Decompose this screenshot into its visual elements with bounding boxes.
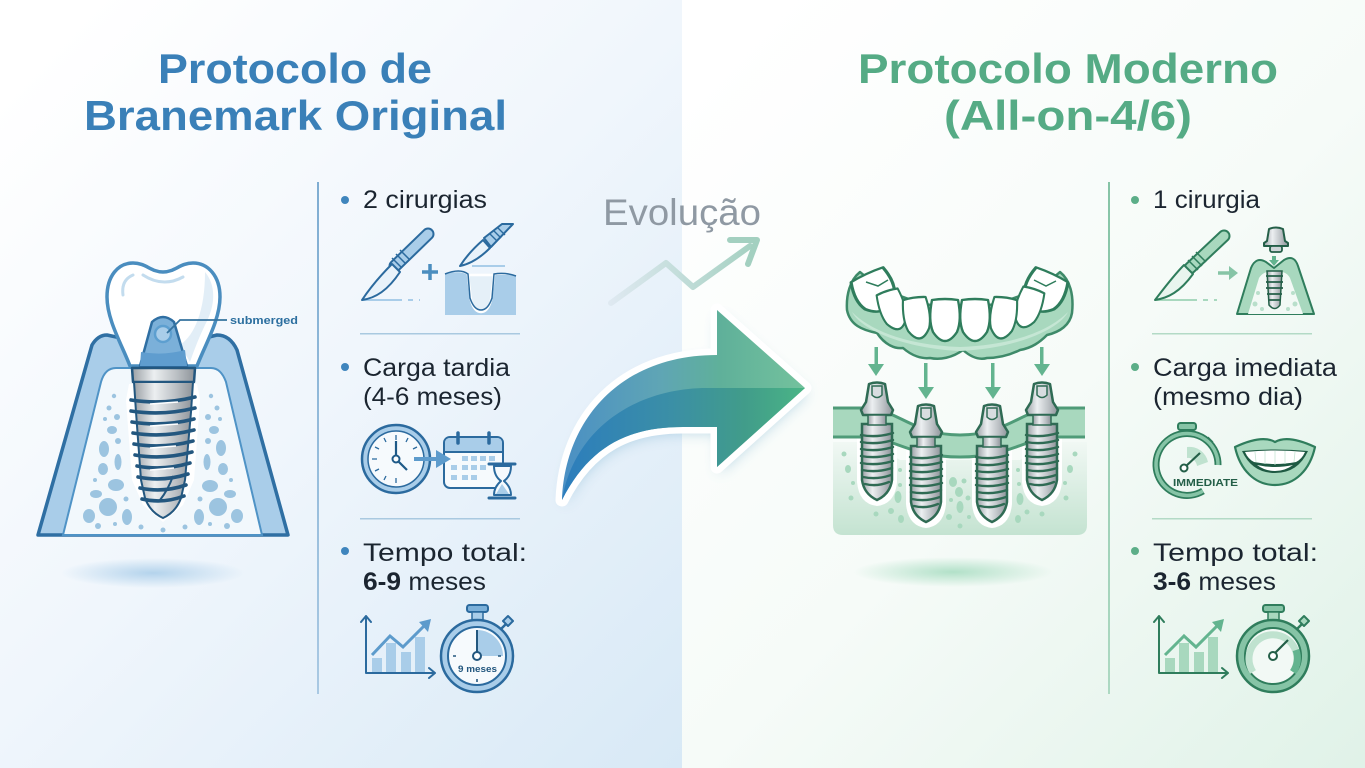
arrows: placement of the implants [868, 347, 1050, 399]
icon: clock, calendar and hourglass [362, 425, 515, 498]
right item: 1 cirurgia [1131, 186, 1314, 314]
title: Protocolo de Branemark Original: Protocolo de [158, 45, 432, 92]
right separator [1152, 333, 1312, 334]
left separator [360, 333, 520, 334]
title: Protocolo Moderno (All-on-4/6) [858, 45, 1278, 139]
title: Protocolo Moderno (All-on-4/6): (All-on-4/6) [944, 92, 1192, 139]
icon: stopwatch 9 meses [441, 605, 513, 692]
left item: 2 cirurgias: 2 cirurgias [363, 186, 487, 214]
left item: Carga tardia: (4-6 meses) [363, 383, 502, 411]
title: Protocolo Moderno (All-on-4/6): Protocolo Moderno [858, 45, 1278, 92]
icon: speedometer stopwatch [1237, 605, 1309, 692]
left item: Carga tardia: Carga tardia [363, 354, 510, 382]
icon: growth chart [361, 616, 435, 678]
icon: smile [1235, 439, 1315, 485]
left item: Tempo total: 6-9 meses [363, 568, 486, 596]
left item: 2 cirurgias [341, 186, 516, 315]
icon: stopwatch 9 meses: 9 meses [458, 664, 497, 675]
left item: Tempo total: Tempo total: [363, 539, 527, 567]
right item: Tempo total: 3-6 meses [1153, 568, 1276, 596]
right item: Carga imediata: Carga imediata [1153, 354, 1337, 382]
illustration: single tooth with submerged implant [38, 263, 298, 588]
icon: immediate stopwatch [1156, 423, 1238, 495]
right item: Carga imediata [1131, 354, 1337, 495]
label: Evolução: Evolução [603, 192, 761, 233]
right separator [1152, 518, 1312, 520]
denture arch [847, 265, 1072, 359]
illustration: single tooth with submerged implant: submerged [230, 315, 298, 327]
icon: two scalpels, plus sign and incision [362, 224, 516, 315]
right item: 1 cirurgia: 1 cirurgia [1153, 186, 1260, 214]
right item: Carga imediata: (mesmo dia) [1153, 383, 1303, 411]
background: left blue panel [0, 0, 682, 768]
arrow: main evolution arrow [562, 310, 807, 506]
title: Protocolo de Branemark Original [84, 45, 507, 139]
left item: Tempo total [341, 539, 527, 692]
title: Protocolo de Branemark Original: Branemark Original [84, 92, 507, 139]
right item: Tempo total: Tempo total: [1153, 539, 1318, 567]
left separator [360, 518, 520, 520]
icon: growth chart [1154, 616, 1228, 678]
icon: faint zigzag trend arrow [611, 240, 757, 303]
illustration: full arch on four implants [833, 265, 1087, 587]
background: right green panel [682, 0, 1365, 768]
left item: Carga tardia [341, 354, 515, 498]
right divider [1108, 182, 1110, 694]
icon: immediate stopwatch: IMMEDIATE [1173, 477, 1238, 489]
left divider [317, 182, 319, 694]
icon: scalpel to implant [1155, 228, 1314, 314]
right item: Tempo total [1131, 539, 1318, 692]
